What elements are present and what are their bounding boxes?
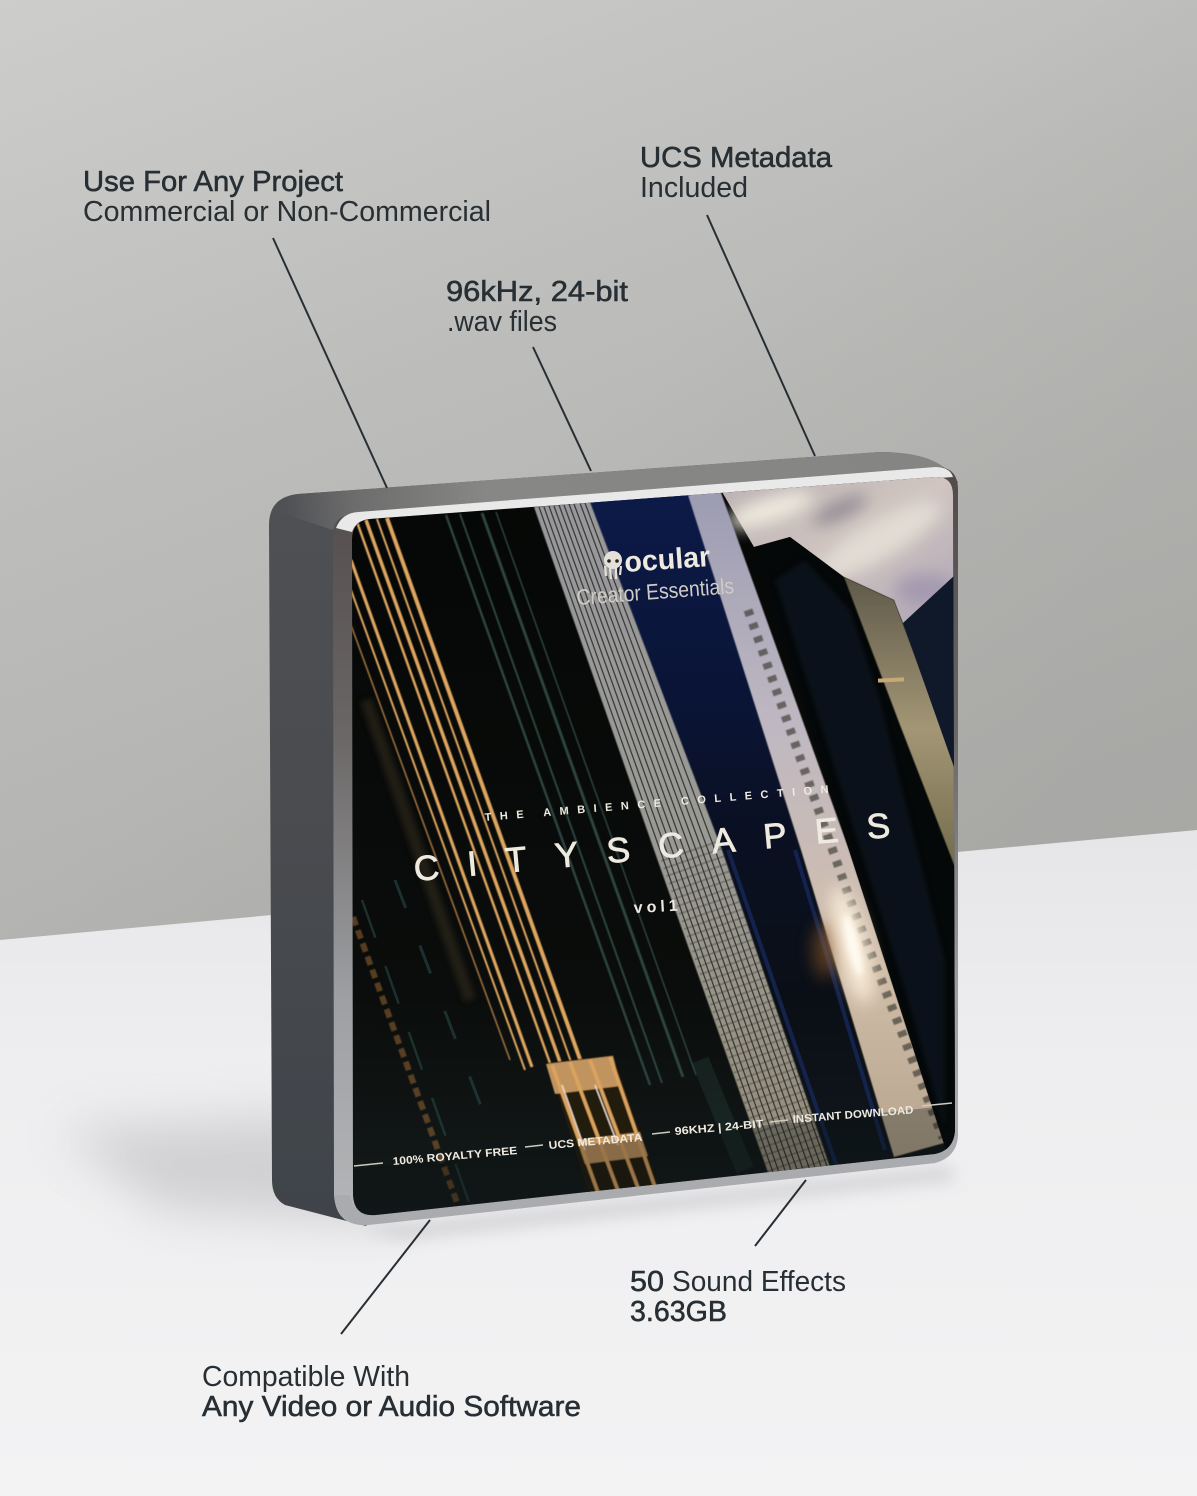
leader line (273, 238, 387, 488)
orange girders (351, 518, 581, 1070)
cover volume: vol1 (633, 898, 678, 917)
sun glow (813, 883, 880, 1007)
tower floor bands (690, 850, 800, 1170)
box front frame (333, 467, 958, 1225)
cover collection line: THE AMBIENCE COLLECTION (484, 784, 829, 824)
cover feature strip: 100% ROYALTY FREE (392, 1145, 518, 1168)
subtext: Compatible With (202, 1361, 410, 1393)
sky (722, 477, 954, 623)
leader line (755, 1180, 806, 1246)
frame highlight top (336, 467, 953, 532)
callout: sound effects (630, 1180, 846, 1328)
callout: compatibility (202, 1220, 581, 1423)
orange lower cluster (546, 1055, 660, 1198)
leader line (341, 1220, 430, 1334)
callout: any project (83, 166, 491, 488)
teal lines (446, 512, 745, 1170)
count number: 50 (630, 1266, 664, 1298)
count label: Sound Effects (672, 1266, 846, 1298)
callout: audio format (446, 276, 628, 471)
leader line (533, 347, 591, 471)
frame bottom edge (334, 1130, 958, 1225)
strip shadow bands (748, 610, 943, 1138)
dark tower (754, 537, 960, 1160)
left building streaks (353, 700, 490, 1208)
subtext: Commercial or Non-Commercial (83, 196, 491, 228)
callout: metadata (640, 142, 833, 456)
heading: UCS Metadata (640, 142, 833, 174)
box side face (269, 452, 958, 1226)
tower blue tint (775, 560, 945, 1130)
cover logo text: ocular (623, 541, 711, 579)
background: floor (0, 830, 1197, 1496)
file size: 3.63GB (630, 1296, 727, 1328)
background: wall (0, 0, 1197, 1000)
leader line (707, 215, 815, 456)
box top face (272, 452, 945, 530)
grey glass tower (534, 502, 831, 1178)
heading: 96kHz, 24-bit (446, 276, 628, 308)
cover logo icon (604, 551, 622, 579)
heading: Any Video or Audio Software (202, 1391, 581, 1423)
subtext: .wav files (447, 306, 557, 338)
product box (269, 452, 970, 1230)
cover artwork (340, 460, 970, 1230)
cover title: CITYSCAPES (412, 806, 892, 889)
blue edge streak (728, 850, 885, 1170)
blue band (590, 494, 894, 1170)
floor shadow (60, 1115, 955, 1240)
bottom shade (350, 1105, 955, 1220)
far tower (903, 575, 955, 770)
tan tower ledge (878, 677, 904, 683)
heading: Use For Any Project (83, 166, 343, 198)
cover feature strip: UCS METADATA (548, 1132, 643, 1152)
light strip tower (688, 490, 944, 1157)
cover feature strip: INSTANT DOWNLOAD (792, 1104, 914, 1126)
cover feature strip (354, 1103, 952, 1168)
tan tower face (844, 577, 960, 880)
clouds (723, 485, 955, 606)
cover feature strip: 96KHZ | 24-BIT (674, 1118, 764, 1138)
cover subtitle: Creator Essentials (576, 573, 735, 610)
subtext: Included (640, 172, 748, 204)
tower window lines (539, 503, 829, 1178)
